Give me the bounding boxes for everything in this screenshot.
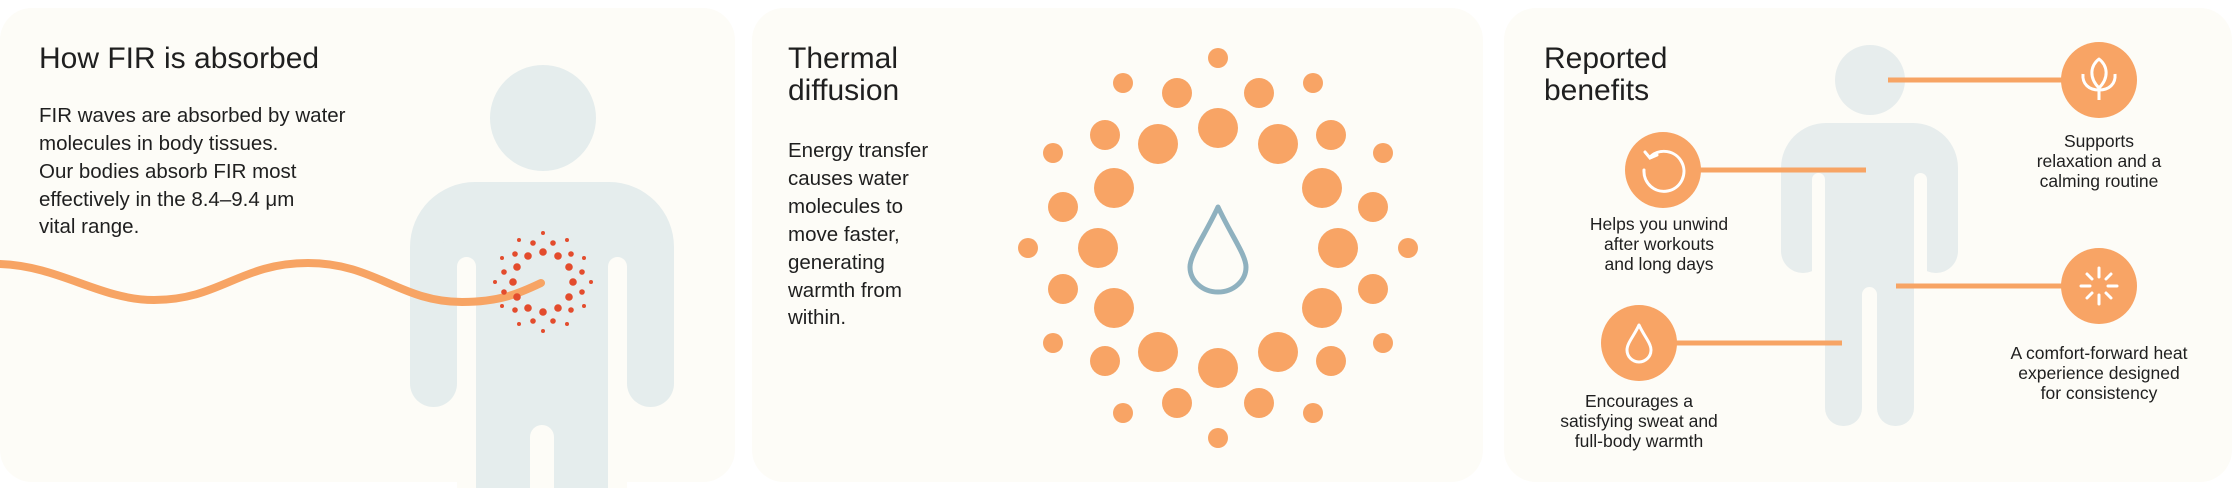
callout: unwind: Helps you unwind [1590, 214, 1728, 234]
figure: human silhouette [1781, 45, 1958, 426]
callout: relaxation: Supports [2064, 131, 2134, 151]
callout: comfort heat: for consistency [2041, 383, 2158, 403]
text block: energy transfer: generating [788, 251, 885, 274]
text block: FIR absorption description: Our bodies absorb FIR most [39, 160, 297, 183]
figure: human silhouette [410, 65, 674, 488]
panel: reported benefits [1504, 8, 2232, 482]
text block: FIR absorption description: vital range. [39, 215, 139, 238]
callout: unwind: after workouts [1604, 234, 1714, 254]
heading: Reported benefits: Reported [1544, 42, 1667, 75]
dots: molecule rings [1018, 48, 1418, 448]
callout: relaxation: relaxation and a [2037, 151, 2162, 171]
callout: comfort heat: A comfort-forward heat [2010, 343, 2188, 363]
text block: FIR absorption description: molecules in body tissues. [39, 132, 278, 155]
callout: comfort heat: experience designed [2018, 363, 2180, 383]
callout: sweat: satisfying sweat and [1560, 411, 1718, 431]
icon: sprout [2083, 59, 2115, 100]
heading: Thermal diffusion: diffusion [788, 74, 899, 107]
icon: sparkle [2081, 268, 2117, 304]
text block: FIR absorption description: FIR waves are absorbed by water [39, 104, 346, 127]
text block: energy transfer: warmth from [787, 279, 902, 302]
text block: FIR absorption description: effectively in the 8.4–9.4 μm [39, 188, 294, 211]
callout: sweat [1560, 305, 1842, 451]
heading: Reported benefits: benefits [1544, 74, 1649, 107]
callout: relaxation: calming routine [2040, 171, 2158, 191]
callout: comfort heat [1896, 248, 2188, 403]
callout: sweat: full-body warmth [1575, 431, 1703, 451]
text block: energy transfer: within. [787, 306, 846, 329]
text block: energy transfer: Energy transfer [788, 139, 928, 162]
callout: unwind [1590, 132, 1866, 274]
text block: energy transfer: move faster, [788, 223, 900, 246]
heading: Thermal diffusion: Thermal [788, 42, 898, 75]
callout: relaxation [1888, 42, 2162, 191]
text block: energy transfer: molecules to [788, 195, 903, 218]
text block: energy transfer: causes water [788, 167, 909, 190]
dots: absorption cluster [493, 231, 593, 333]
panel: thermal diffusion [752, 8, 1483, 482]
icon: refresh [1644, 151, 1684, 191]
panel: how FIR is absorbed [0, 8, 735, 488]
callout: sweat: Encourages a [1585, 391, 1693, 411]
icon: water drop [1190, 207, 1246, 292]
icon: drop [1627, 325, 1651, 362]
wave: FIR [0, 263, 541, 302]
heading: How FIR is absorbed: How FIR is absorbed [39, 42, 319, 75]
callout: unwind: and long days [1605, 254, 1714, 274]
